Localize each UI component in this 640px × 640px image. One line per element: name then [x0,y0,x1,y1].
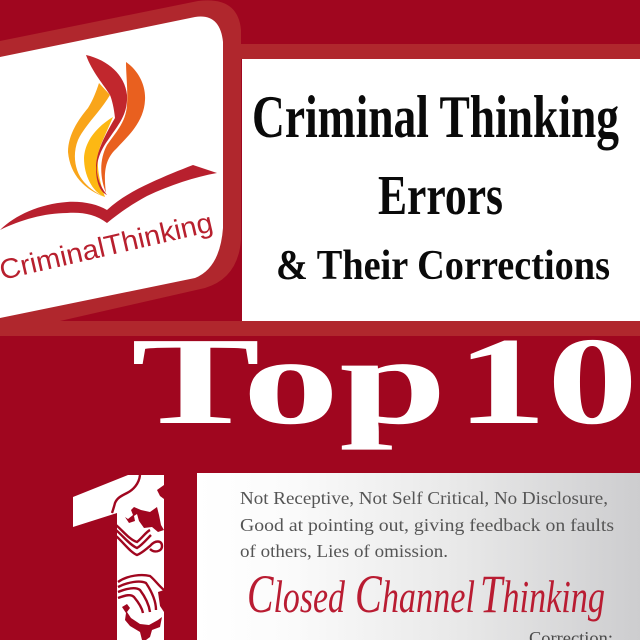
error name: Closed [247,564,346,624]
title text: Errors [378,165,503,227]
error name: Thinking [480,564,605,624]
title text: & Their Corrections [276,243,610,289]
error name [247,564,605,624]
header lighter stripes [0,44,640,336]
title text [252,84,619,289]
heading: Top 10 [131,313,638,451]
numeral 1 with ornament [73,475,164,640]
panel: error 1 [197,473,640,640]
description text: Good at pointing out, giving feedback on faults [240,515,614,535]
icon: open book [0,165,217,230]
description text: of others, Lies of omission. [240,541,448,561]
description text: Not Receptive, Not Self Critical, No Disclosure, [240,488,608,508]
description text [240,488,614,561]
heading: Top 10: 10 [456,313,638,451]
heading: Top 10: Top [131,313,447,451]
title panel [242,59,640,321]
logo wordmark: CriminalThinking [0,207,216,286]
logo badge [0,0,241,336]
error name: Channel [355,564,475,624]
icon: flame [68,55,145,197]
